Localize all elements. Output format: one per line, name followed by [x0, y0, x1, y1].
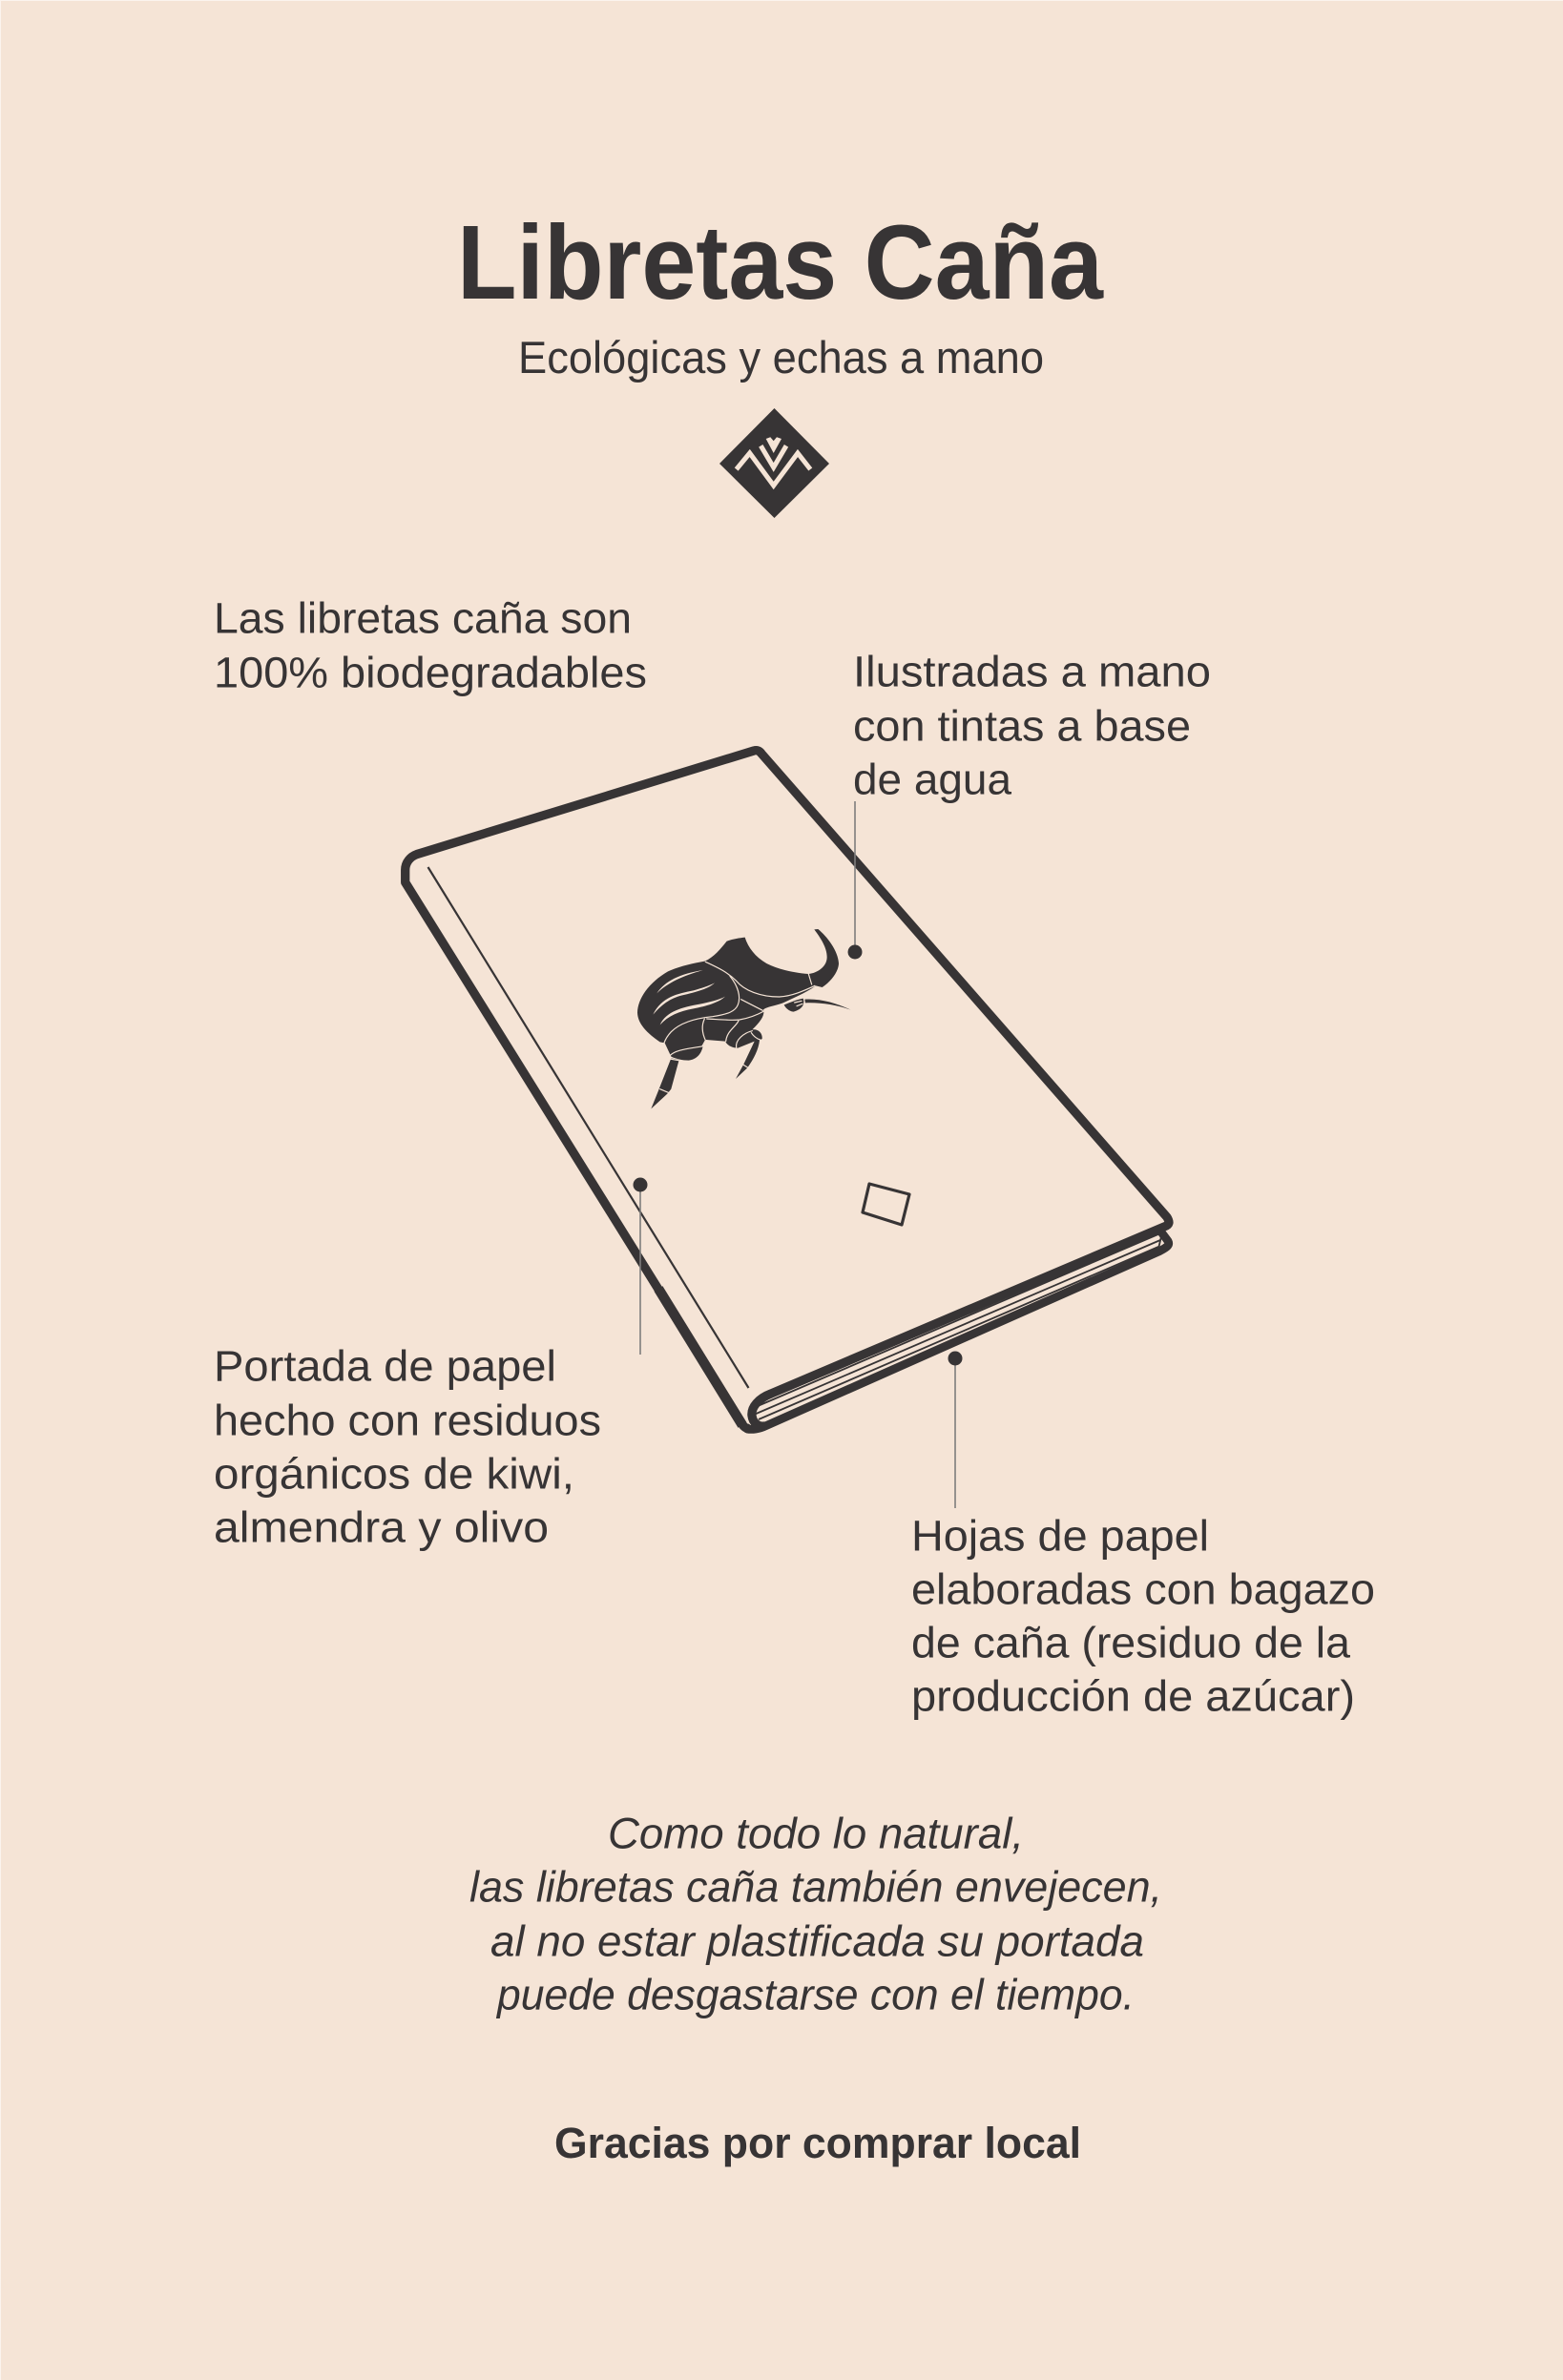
text block: hand illustrated: Ilustradas a mano	[853, 647, 1211, 696]
text block: sheets of paper: elaboradas con bagazo	[911, 1564, 1375, 1614]
text block: aging note: puede desgastarse con el tiempo.	[495, 1971, 1135, 2018]
text block: cover paper: Portada de papel	[214, 1341, 556, 1391]
text block: biodegradable: Las libretas caña son	[214, 593, 632, 643]
page edge lines	[754, 1232, 1162, 1419]
text block: sheets of paper: producción de azúcar)	[911, 1671, 1355, 1721]
text block: cover paper: hecho con residuos	[214, 1397, 601, 1444]
callout: left leader	[634, 1177, 647, 1355]
text block: biodegradable: 100% biodegradables	[214, 649, 647, 696]
text block: sheets of paper	[911, 1511, 1375, 1721]
callout: top leader	[847, 801, 863, 960]
text block: hand illustrated: con tintas a base	[853, 702, 1191, 750]
spine thickening near base	[658, 1289, 742, 1425]
text block: cover paper: orgánicos de kiwi,	[214, 1450, 574, 1498]
callout: bottom leader	[948, 1351, 962, 1508]
text block: aging note: Como todo lo natural,	[608, 1809, 1024, 1858]
text block: aging note	[469, 1809, 1162, 2018]
illustration: notebook	[406, 751, 1169, 1429]
text block: hand illustrated	[853, 647, 1211, 803]
text block: hand illustrated: de agua	[853, 755, 1012, 803]
lower cover strip	[747, 1233, 1169, 1429]
text block: cover paper	[214, 1341, 601, 1551]
title: Libretas Caña	[457, 204, 1104, 321]
text block: biodegradable	[214, 593, 647, 696]
closing message: Gracias por comprar local	[554, 2119, 1081, 2167]
text block: cover paper: almendra y olivo	[214, 1503, 549, 1551]
subtitle: Ecológicas y echas a mano	[518, 332, 1044, 383]
hinge line	[427, 867, 748, 1388]
icon: rhinoceros beetle	[637, 929, 851, 1108]
icon: diamond logo	[719, 408, 829, 518]
text block: sheets of paper: de caña (residuo de la	[911, 1618, 1351, 1667]
text block: aging note: al no estar plastificada su portada	[490, 1917, 1144, 1965]
notebook left edge and top cover outline	[406, 751, 1169, 1428]
text block: aging note: las libretas caña también envejecen,	[469, 1862, 1162, 1912]
small cover label	[863, 1184, 909, 1225]
text block: sheets of paper: Hojas de papel	[911, 1511, 1209, 1561]
